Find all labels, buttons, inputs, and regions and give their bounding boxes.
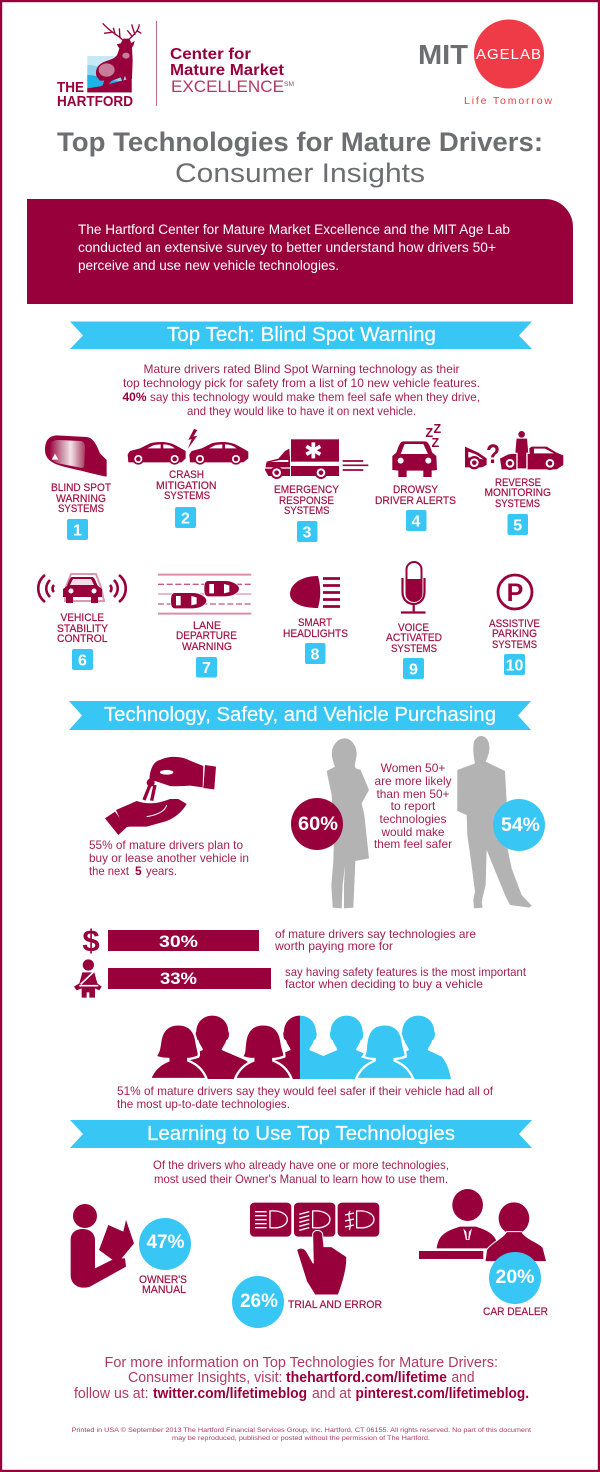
item 8: smart headlights: 8 bbox=[311, 646, 320, 664]
item 3: emergency response systems: 3 bbox=[303, 524, 312, 542]
item 3: emergency response systems: EMERGENCY bbox=[274, 484, 340, 496]
item 1: blind spot warning systems: WARNING bbox=[56, 493, 106, 505]
text: more information bbox=[74, 1355, 529, 1402]
panel: introduction: The Hartford Center for Mature Market Excellence and the MIT Age Lab bbox=[78, 222, 510, 237]
icon: person reading manual bbox=[71, 1204, 134, 1288]
stat: car dealer 20% bbox=[419, 1189, 548, 1318]
stat: owner's manual 47% bbox=[71, 1204, 191, 1296]
text: 55% plan to buy: 55% of mature drivers plan to bbox=[89, 838, 243, 852]
logo: Center for Mature Market Excellence bbox=[170, 46, 294, 96]
icon: side mirror bbox=[45, 435, 107, 477]
item 4: drowsy driver alerts bbox=[375, 422, 456, 531]
stat: owner's manual 47%: OWNER'S bbox=[139, 1274, 187, 1286]
text: legal fine print bbox=[72, 1426, 531, 1442]
logo: Center for Mature Market Excellence: SM bbox=[284, 82, 294, 88]
banner: Top Tech bbox=[70, 322, 532, 349]
text: more information: thehartford.com/lifetime bbox=[286, 1370, 447, 1386]
icon: light switches with pointing hand bbox=[250, 1203, 379, 1295]
icon: person with seat belt bbox=[74, 959, 102, 998]
icon: cars changing lanes bbox=[158, 575, 251, 614]
item 9: voice activated systems bbox=[386, 562, 442, 679]
item 6: vehicle stability control: VEHICLE bbox=[60, 612, 104, 624]
icon: dollar sign: $ bbox=[82, 923, 100, 958]
panel: introduction bbox=[27, 199, 573, 304]
stat: trial and error 26% bbox=[232, 1203, 382, 1328]
item 5: reverse monitoring systems: REVERSE bbox=[495, 477, 541, 489]
icon: microphone bbox=[401, 562, 426, 612]
text: women vs men: them feel safer bbox=[374, 837, 452, 851]
item 4: drowsy driver alerts: Z bbox=[432, 436, 440, 450]
icon: car with signal waves bbox=[38, 574, 126, 603]
item 2: crash mitigation systems: 2 bbox=[181, 510, 190, 528]
panel: introduction: perceive and use new vehicle technologies. bbox=[78, 258, 339, 273]
item 5: reverse monitoring systems bbox=[465, 431, 563, 535]
stat: 30% worth paying more bbox=[82, 923, 476, 958]
item 9: voice activated systems: VOICE bbox=[398, 622, 429, 634]
text: 55% plan to buy: the next bbox=[89, 864, 130, 878]
item 8: smart headlights: HEADLIGHTS bbox=[283, 628, 348, 640]
text: 55% plan to buy: buy or lease another vehicle in bbox=[89, 851, 249, 865]
panel: introduction: conducted an extensive survey to better understand how drivers 50+ bbox=[78, 240, 496, 255]
text: more information: pinterest.com/lifetimeblog. bbox=[356, 1386, 529, 1402]
item 3: emergency response systems: SYSTEMS bbox=[284, 505, 330, 517]
text: legal fine print: Printed in USA © September 2013 The Hartford Financial Services Group, Inc. Hartford, CT 06155. All rights reserved. No part of this document bbox=[72, 1426, 531, 1434]
chart: people silhouettes 51% split bbox=[150, 1016, 451, 1079]
item 4: drowsy driver alerts: DROWSY bbox=[393, 484, 439, 496]
item 8: smart headlights: SMART bbox=[298, 617, 332, 629]
icon: hands passing keys bbox=[105, 757, 216, 835]
item 8: smart headlights bbox=[283, 576, 348, 664]
icon: woman silhouette with 60%: 60% bbox=[298, 814, 338, 835]
text: legal fine print: may be reproduced, published or posted without the permission of The Hartford. bbox=[172, 1435, 430, 1442]
logo: MIT AgeLab: Life Tomorrow bbox=[464, 95, 552, 107]
item 1: blind spot warning systems bbox=[45, 435, 111, 540]
item 7: lane departure warning bbox=[158, 575, 251, 678]
text: blind spot summary: and they would like to have it on next vehicle. bbox=[187, 404, 416, 418]
logo: The Hartford bbox=[57, 23, 141, 110]
logo: MIT AgeLab: MIT bbox=[418, 39, 468, 70]
item 10: assistive parking systems: PARKING bbox=[492, 628, 537, 640]
text: women vs men: Women 50+ bbox=[381, 761, 445, 775]
item 10: assistive parking systems bbox=[489, 575, 540, 675]
icon: car reversing toward person bbox=[465, 431, 563, 470]
icon: stag on blue square bbox=[87, 23, 141, 92]
banner: Technology, Safety, and Vehicle Purchasing bbox=[69, 701, 531, 730]
item 6: vehicle stability control bbox=[38, 574, 126, 670]
item 10: assistive parking systems: 10 bbox=[506, 658, 524, 674]
item 7: lane departure warning: DEPARTURE bbox=[176, 630, 237, 642]
icon: man silhouette with 54%: 54% bbox=[501, 815, 540, 836]
logo: MIT AgeLab: AGELAB bbox=[476, 46, 541, 63]
stat: 33% safety features: 33% bbox=[160, 969, 197, 988]
item 3: emergency response systems: RESPONSE bbox=[279, 495, 334, 507]
text: 55% plan to buy bbox=[89, 838, 249, 878]
item 4: drowsy driver alerts: Z bbox=[426, 426, 434, 440]
text: women vs men: than men 50+ bbox=[376, 787, 450, 801]
text: 51% feel safer bbox=[117, 1084, 494, 1111]
stat: 33% safety features: say having safety features is the most important bbox=[285, 965, 527, 979]
icon: dealer and customer bbox=[419, 1189, 547, 1262]
banner: Learning to Use Top Technologies: Learning to Use Top Technologies bbox=[147, 1123, 455, 1145]
wordmark: THE bbox=[57, 79, 84, 96]
text: blind spot summary bbox=[122, 362, 480, 418]
item 5: reverse monitoring systems: ? bbox=[486, 439, 500, 469]
item 1: blind spot warning systems: BLIND SPOT bbox=[51, 482, 111, 494]
item 7: lane departure warning: LANE bbox=[193, 620, 221, 632]
text: women vs men: would make bbox=[381, 825, 445, 839]
item 4: drowsy driver alerts: DRIVER ALERTS bbox=[375, 495, 456, 507]
icon: headlight beam bbox=[290, 576, 340, 608]
item 1: blind spot warning systems: 1 bbox=[73, 522, 82, 540]
item 2: crash mitigation systems bbox=[128, 429, 248, 528]
banner: Learning to Use Top Technologies bbox=[70, 1120, 532, 1148]
item 7: lane departure warning: WARNING bbox=[182, 641, 232, 653]
logo: Center for Mature Market Excellence: EXCELLENCE bbox=[171, 77, 284, 96]
text: women vs men: to report bbox=[391, 799, 436, 813]
text: learning intro bbox=[153, 1158, 449, 1186]
item 5: reverse monitoring systems: 5 bbox=[513, 518, 522, 534]
text: more information: For more information on Top Technologies for Mature Drivers: bbox=[104, 1355, 498, 1371]
text: blind spot summary: top technology pick for safety from a list of 10 new vehicle features. bbox=[123, 376, 480, 390]
text: blind spot summary: Mature drivers rated Blind Spot Warning technology as their bbox=[144, 362, 460, 376]
item 6: vehicle stability control: CONTROL bbox=[57, 633, 108, 645]
logo: MIT AgeLab bbox=[418, 20, 552, 107]
text: blind spot summary: 40% bbox=[122, 390, 147, 404]
item 4: drowsy driver alerts: Z bbox=[434, 422, 442, 436]
item 10: assistive parking systems: SYSTEMS bbox=[492, 639, 537, 651]
text: learning intro: Of the drivers who already have one or more technologies, bbox=[153, 1158, 449, 1172]
wordmark bbox=[57, 79, 133, 110]
item 2: crash mitigation systems: MITIGATION bbox=[156, 480, 217, 492]
wordmark: HARTFORD bbox=[57, 93, 133, 110]
icon: man silhouette with 54% bbox=[457, 736, 545, 908]
logo: Center for Mature Market Excellence: Center for bbox=[170, 46, 251, 63]
item 9: voice activated systems: 9 bbox=[409, 662, 418, 678]
item 1: blind spot warning systems: SYSTEMS bbox=[58, 503, 104, 515]
title: Top Technologies for Mature Drivers: bbox=[57, 127, 543, 157]
stat: car dealer 20%: CAR DEALER bbox=[483, 1306, 548, 1318]
stat: 30% worth paying more: 30% bbox=[159, 932, 198, 951]
stat: car dealer 20%: 20% bbox=[496, 1267, 535, 1288]
stat: 33% safety features: factor when deciding to buy a vehicle bbox=[285, 977, 483, 991]
icon: two cars colliding bbox=[128, 429, 248, 465]
stat: 33% safety features bbox=[74, 959, 527, 998]
banner: Technology, Safety, and Vehicle Purchasing: Technology, Safety, and Vehicle Purchasing bbox=[104, 704, 496, 726]
item 5: reverse monitoring systems: SYSTEMS bbox=[495, 498, 540, 510]
item 2: crash mitigation systems: CRASH bbox=[169, 469, 204, 481]
text: more information: Consumer Insights, visit: bbox=[128, 1370, 282, 1386]
icon: ambulance bbox=[265, 439, 368, 479]
text: more information: follow us at: bbox=[74, 1386, 148, 1402]
icon: woman silhouette with 60% bbox=[291, 738, 369, 908]
item 7: lane departure warning: 7 bbox=[202, 660, 211, 677]
logo: Center for Mature Market Excellence: Mature Market bbox=[170, 62, 284, 79]
text: 51% feel safer: the most up-to-date technologies. bbox=[117, 1097, 290, 1111]
item 6: vehicle stability control: STABILITY bbox=[57, 623, 109, 635]
item 9: voice activated systems: ACTIVATED bbox=[386, 632, 442, 644]
text: more information: and bbox=[452, 1370, 474, 1386]
stat: trial and error 26%: TRIAL AND ERROR bbox=[288, 1299, 382, 1311]
stat: 30% worth paying more: worth paying more for bbox=[274, 939, 393, 953]
text: 51% feel safer: 51% of mature drivers say they would feel safer if their vehicle had all of bbox=[117, 1084, 494, 1098]
text: women vs men: technologies bbox=[380, 812, 446, 826]
icon: car with zzz bbox=[392, 441, 437, 477]
text: women vs men bbox=[374, 761, 452, 851]
item 10: assistive parking systems: ASSISTIVE bbox=[489, 618, 540, 630]
item 2: crash mitigation systems: SYSTEMS bbox=[164, 490, 210, 502]
text: more information: and at bbox=[312, 1386, 351, 1402]
item 5: reverse monitoring systems: MONITORING bbox=[484, 487, 551, 499]
text: more information: twitter.com/lifetimeblog bbox=[153, 1386, 307, 1402]
stat: trial and error 26%: 26% bbox=[240, 1291, 278, 1312]
stat: owner's manual 47%: MANUAL bbox=[142, 1284, 186, 1296]
text: 55% plan to buy: 5 bbox=[135, 864, 142, 878]
stat: owner's manual 47%: 47% bbox=[146, 1232, 185, 1253]
text: learning intro: most used their Owner's Manual to learn how to use them. bbox=[154, 1172, 448, 1186]
item 6: vehicle stability control: 6 bbox=[78, 652, 87, 670]
icon: parking sign: P bbox=[507, 579, 523, 607]
stat: 30% worth paying more: of mature drivers say technologies are bbox=[275, 927, 476, 941]
banner: Top Tech: Top Tech: Blind Spot Warning bbox=[167, 324, 436, 346]
title: Consumer Insights bbox=[175, 158, 425, 188]
text: blind spot summary: say this technology would make them feel safe when they drive, bbox=[150, 390, 480, 404]
item 4: drowsy driver alerts: 4 bbox=[412, 514, 421, 530]
text: 55% plan to buy: years. bbox=[146, 864, 177, 878]
text: women vs men: are more likely bbox=[374, 774, 452, 788]
title bbox=[57, 127, 543, 188]
item 9: voice activated systems: SYSTEMS bbox=[391, 643, 437, 655]
item 3: emergency response systems bbox=[265, 439, 368, 542]
